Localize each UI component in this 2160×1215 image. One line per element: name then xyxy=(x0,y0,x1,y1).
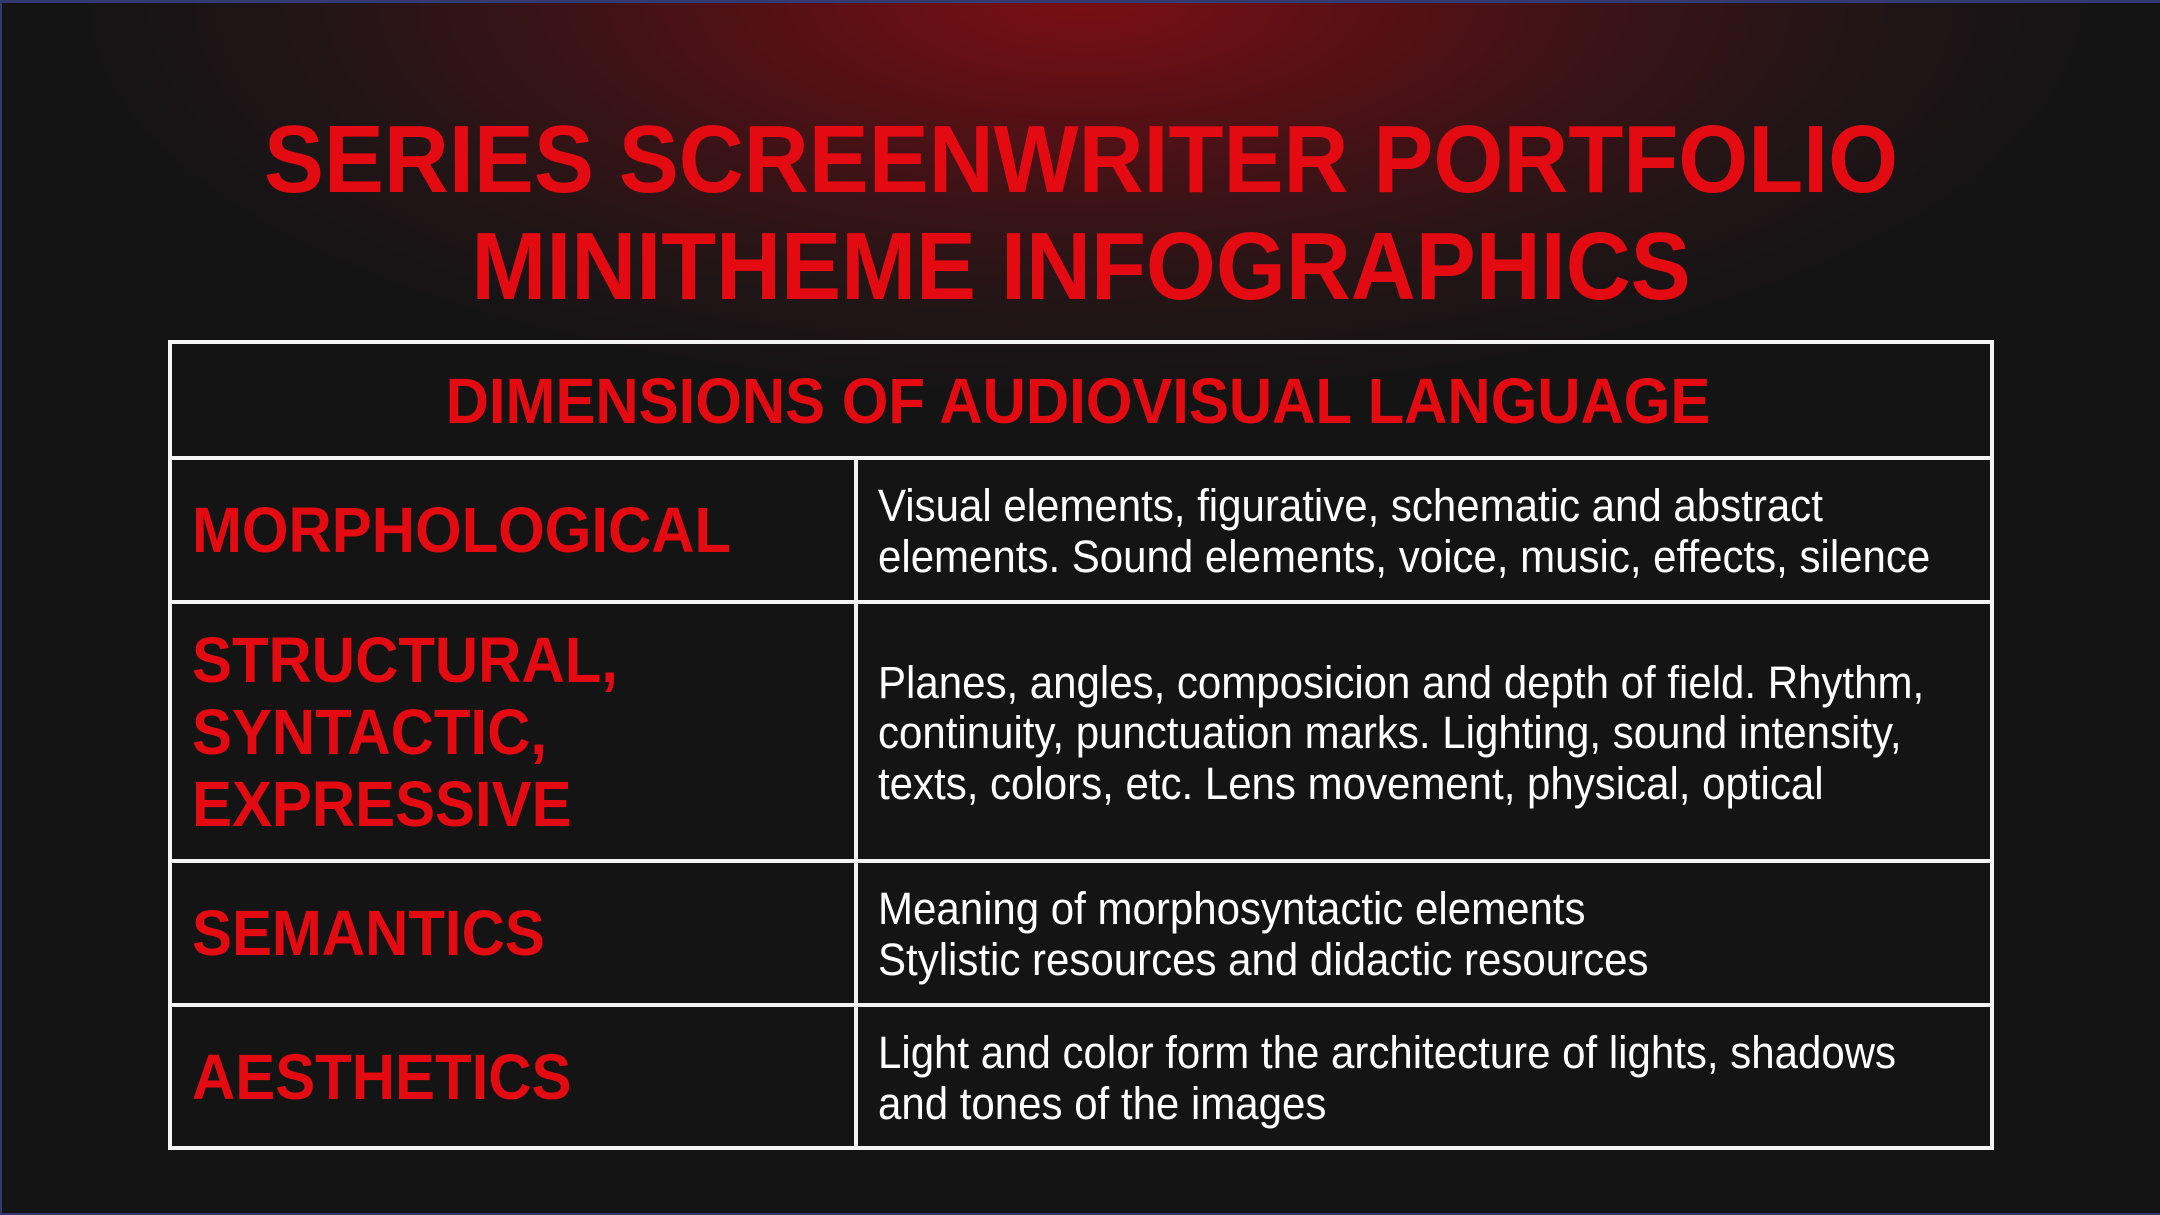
row text: aesthetics: Light and color form the architecture of lights, shadows xyxy=(878,1027,1896,1078)
row text: structural, syntactic, expressive: continuity, punctuation marks. Lighting, sound intensity, xyxy=(878,707,1902,758)
row text: semantics: Meaning of morphosyntactic elements xyxy=(878,883,1585,934)
row text: semantics xyxy=(878,883,1648,985)
title: SERIES SCREENWRITER PORTFOLIO xyxy=(264,106,1898,213)
row label: aesthetics: AESTHETICS xyxy=(192,1041,571,1113)
background glow xyxy=(0,0,2160,560)
row label: structural, syntactic, expressive xyxy=(192,624,618,840)
row text: structural, syntactic, expressive: texts, colors, etc. Lens movement, physical, optical xyxy=(878,758,1824,809)
row label: structural, syntactic, expressive: SYNTACTIC, xyxy=(192,696,547,768)
row text: morphological: elements. Sound elements, voice, music, effects, silence xyxy=(878,531,1930,582)
row label: structural, syntactic, expressive: STRUCTURAL, xyxy=(192,624,618,696)
row text: morphological xyxy=(878,480,1930,582)
table xyxy=(168,340,1994,1150)
row text: aesthetics: and tones of the images xyxy=(878,1078,1326,1129)
row text: structural, syntactic, expressive: Planes, angles, composicion and depth of field. Rhythm, xyxy=(878,657,1924,708)
row label: morphological: MORPHOLOGICAL xyxy=(192,494,731,566)
row text: semantics: Stylistic resources and didactic resources xyxy=(878,934,1648,985)
title: MINITHEME INFOGRAPHICS xyxy=(471,213,1691,320)
row label: structural, syntactic, expressive: EXPRESSIVE xyxy=(192,768,572,840)
row text: morphological: Visual elements, figurative, schematic and abstract xyxy=(878,480,1823,531)
title xyxy=(264,106,1898,320)
row text: structural, syntactic, expressive xyxy=(878,657,1924,809)
table heading: DIMENSIONS OF AUDIOVISUAL LANGUAGE xyxy=(446,365,1710,437)
row label: semantics: SEMANTICS xyxy=(192,897,545,969)
row text: aesthetics xyxy=(878,1027,1896,1129)
